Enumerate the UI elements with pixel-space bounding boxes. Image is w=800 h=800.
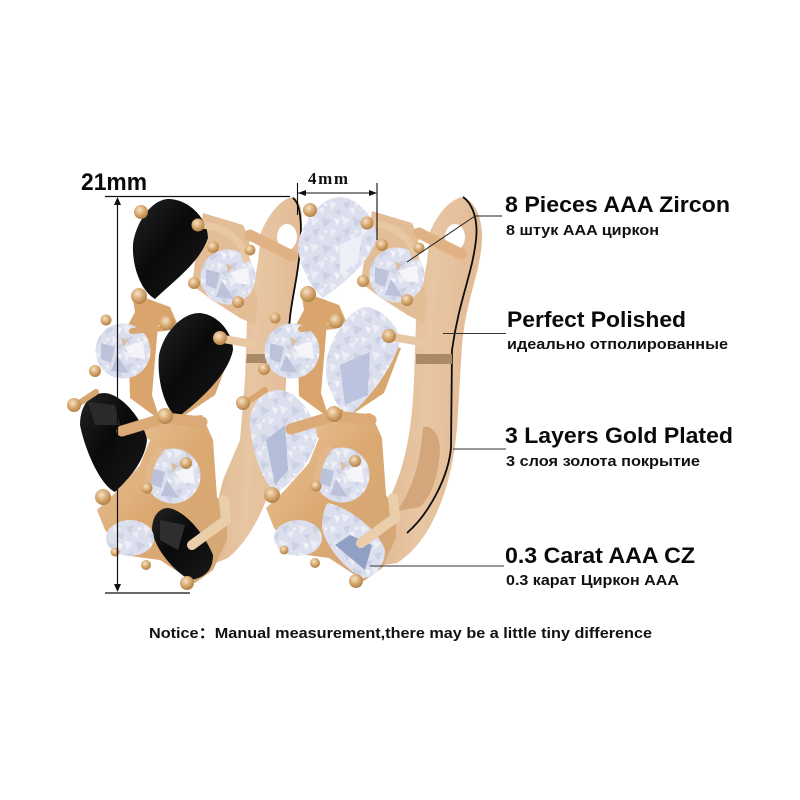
prongs and arms: right: [236, 203, 461, 588]
gems: clear teardrops: [250, 197, 400, 578]
gems: round zircons right: [264, 248, 424, 556]
leader line: polished: [443, 332, 506, 334]
earring frame base: left: [97, 213, 258, 583]
label: plated: [505, 423, 733, 470]
leader line: cz: [370, 565, 504, 567]
label: zircon: [505, 192, 730, 239]
label: cz: 0.3 Carat AAA CZ: [505, 543, 695, 568]
notice: Notice：Manual measurement,there may be a little tiny difference: [149, 625, 652, 642]
leader line: zircon: [407, 216, 502, 262]
gems: round zircons left: [96, 250, 256, 556]
label: zircon: 8 штук AAA циркон: [506, 222, 659, 239]
earring: left hoop: [208, 197, 302, 566]
earring frame base: right: [266, 211, 427, 581]
dimension: 4mm: [298, 169, 377, 240]
label: polished: идеально отполированные: [507, 336, 728, 353]
dimension: 4mm: 4mm: [308, 169, 348, 188]
gems: black teardrops: [80, 199, 233, 580]
label: polished: Perfect Polished: [507, 307, 686, 332]
label: plated: 3 слоя золота покрытие: [506, 453, 700, 470]
label: zircon: 8 Pieces AAA Zircon: [505, 192, 730, 217]
prongs and arms: left: [67, 205, 292, 590]
label: cz: 0.3 карат Циркон AAA: [506, 572, 679, 589]
earring: right hoop: [378, 197, 482, 566]
label: plated: 3 Layers Gold Plated: [505, 423, 733, 448]
hoop slot: [397, 427, 440, 511]
leader line: plated: [453, 448, 506, 450]
dimension: 21mm: [81, 169, 290, 593]
label: polished: [507, 307, 728, 353]
label: cz: [505, 543, 695, 589]
dimension: 21mm: 21mm: [81, 169, 147, 196]
